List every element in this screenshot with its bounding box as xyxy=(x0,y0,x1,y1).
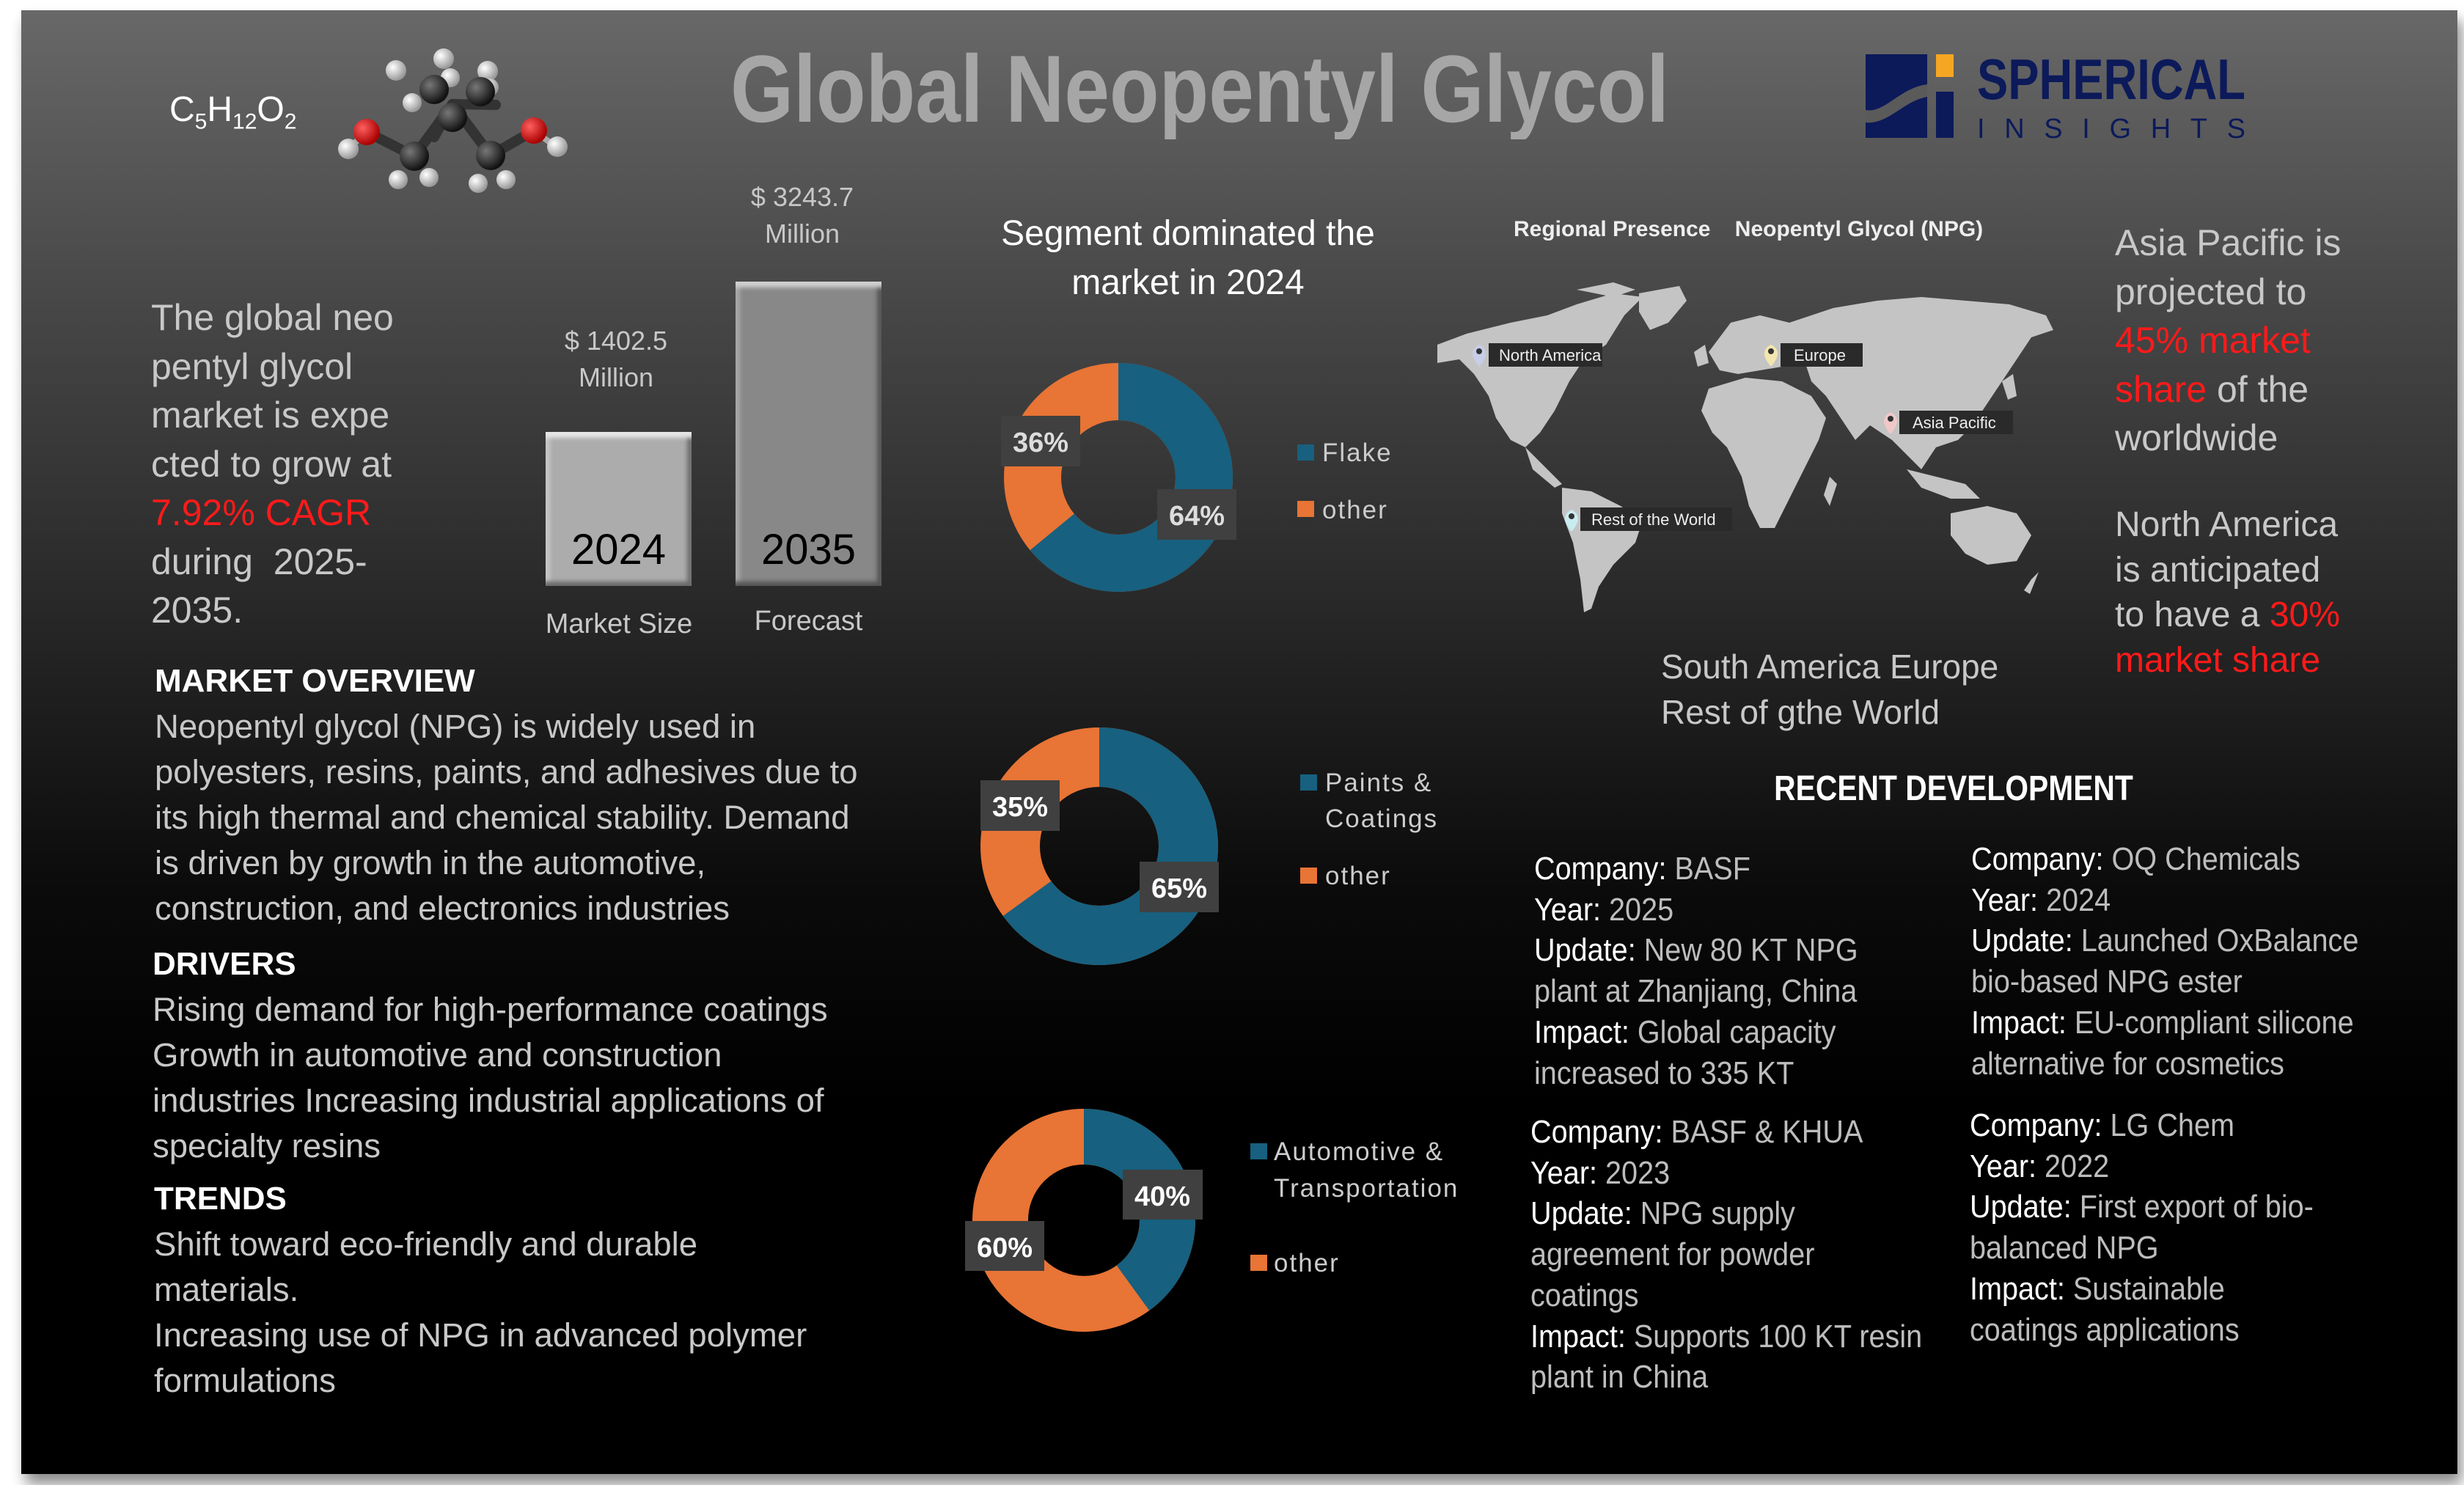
donut chart: automotive & transportation: Transportation xyxy=(1274,1174,1459,1203)
donut chart: paints & coatings: other xyxy=(1325,862,1391,890)
text: region list: Rest of gthe World xyxy=(1661,693,1940,731)
donut chart: paints & coatings: 65% xyxy=(1151,873,1207,904)
dev: BASF & KHUA: Impact: Supports 100 KT resin xyxy=(1530,1319,1922,1354)
panel: drivers: DRIVERS xyxy=(153,946,296,982)
dev: OQ Chemicals: Update: Launched OxBalance xyxy=(1971,923,2358,958)
text: CAGR intro: The global neo xyxy=(151,297,394,338)
dev: BASF: Update: New 80 KT NPG xyxy=(1534,932,1858,968)
donut chart: flake: Flake xyxy=(1322,439,1393,467)
bar 2024 xyxy=(546,432,692,586)
dev: BASF & KHUA: coatings xyxy=(1530,1277,1639,1313)
donut chart: paints & coatings: Coatings xyxy=(1325,804,1438,833)
panel: trends: TRENDS xyxy=(154,1181,287,1217)
dev: OQ Chemicals: bio-based NPG ester xyxy=(1971,964,2243,1000)
dev: LG Chem: coatings applications xyxy=(1970,1312,2240,1348)
dev: BASF xyxy=(1534,851,1858,1091)
dev: BASF: Company: BASF xyxy=(1534,851,1750,887)
panel: market overview: polyesters, resins, paints, and adhesives due to xyxy=(155,753,858,791)
value label 2035 xyxy=(751,182,854,249)
dev: LG Chem: balanced NPG xyxy=(1970,1230,2159,1266)
panel: market overview: MARKET OVERVIEW xyxy=(155,663,475,699)
value label 2024: Million xyxy=(579,362,653,392)
heading: regional presence: Regional Presence Neopentyl Glycol (NPG) xyxy=(1514,217,1983,241)
pin: europe xyxy=(1764,343,1863,367)
panel: drivers: Growth in automotive and construction xyxy=(153,1036,722,1074)
pin: north america: North America xyxy=(1499,346,1602,364)
donut chart: paints & coatings: Paints & xyxy=(1325,769,1432,797)
heading: recent development: RECENT DEVELOPMENT xyxy=(1774,769,2133,808)
donut chart: flake: 64% xyxy=(1169,501,1225,532)
bar 2035: 2035 xyxy=(761,526,856,573)
donut chart: flake: 36% xyxy=(1013,428,1068,458)
donut chart: flake: other xyxy=(1322,496,1388,524)
value label 2035: Million xyxy=(765,219,840,249)
text: asia pacific share xyxy=(2115,222,2341,458)
text: asia pacific share: 45% market xyxy=(2115,320,2311,361)
logo: Spherical Insights xyxy=(1866,53,2245,139)
panel: market overview: Neopentyl glycol (NPG) is widely used in xyxy=(155,708,755,745)
heading: segment: market in 2024 xyxy=(1071,263,1305,302)
donut chart: paints & coatings: 35% xyxy=(992,792,1048,823)
dev: OQ Chemicals: Company: OQ Chemicals xyxy=(1971,841,2300,877)
text: CAGR intro: 2035. xyxy=(151,590,243,631)
panel: trends: Shift toward eco-friendly and durable xyxy=(154,1225,697,1263)
text: CAGR intro xyxy=(151,297,394,631)
panel: drivers xyxy=(153,946,828,1165)
dev: LG Chem: Company: LG Chem xyxy=(1970,1107,2234,1143)
panel: trends: Increasing use of NPG in advanced polymer xyxy=(154,1316,807,1354)
donut chart: automotive & transportation: 40% xyxy=(1134,1181,1190,1212)
dev: OQ Chemicals: Impact: EU-compliant silicone xyxy=(1971,1005,2354,1041)
panel: market overview: its high thermal and chemical stability. Demand xyxy=(155,799,850,836)
donut chart: automotive & transportation: 60% xyxy=(977,1233,1033,1264)
dev: BASF & KHUA xyxy=(1530,1114,1922,1395)
bar 2024: 2024 xyxy=(571,526,666,573)
heading: segment: Segment dominated the xyxy=(1001,214,1375,253)
donut chart: automotive & transportation: Automotive & xyxy=(1274,1137,1444,1166)
bar 2035 xyxy=(736,282,881,586)
axis label market size: Market Size xyxy=(546,609,692,639)
pin: rest of the world xyxy=(1565,507,1732,532)
world map xyxy=(1437,282,2053,612)
text: asia pacific share: worldwide xyxy=(2115,417,2278,458)
pin: rest of the world: Rest of the World xyxy=(1591,510,1716,529)
pin: asia pacific xyxy=(1884,411,2013,434)
dev: LG Chem: Impact: Sustainable xyxy=(1970,1271,2225,1307)
text: north america share: is anticipated xyxy=(2115,550,2320,590)
text: north america share: market share xyxy=(2115,641,2320,679)
dev: BASF: Impact: Global capacity xyxy=(1534,1014,1836,1050)
dev: LG Chem xyxy=(1970,1107,2314,1348)
dev: BASF: increased to 335 KT xyxy=(1534,1055,1794,1091)
dev: BASF & KHUA: Update: NPG supply xyxy=(1530,1195,1795,1231)
dev: BASF: Year: 2025 xyxy=(1534,892,1673,928)
text: CAGR intro: market is expe xyxy=(151,395,389,436)
dev: BASF & KHUA: agreement for powder xyxy=(1530,1236,1814,1272)
panel: market overview xyxy=(155,663,858,927)
value label 2024 xyxy=(565,326,667,392)
panel: drivers: Rising demand for high-performance coatings xyxy=(153,991,828,1028)
text: north america share xyxy=(2115,505,2340,679)
dev: LG Chem: Year: 2022 xyxy=(1970,1148,2109,1184)
dev: OQ Chemicals xyxy=(1971,841,2358,1082)
dev: OQ Chemicals: alternative for cosmetics xyxy=(1971,1046,2284,1082)
donut chart: paints & coatings xyxy=(980,727,1438,965)
text: CAGR intro: pentyl glycol xyxy=(151,346,353,387)
dev: BASF & KHUA: Company: BASF & KHUA xyxy=(1530,1114,1863,1150)
dev: BASF & KHUA: Year: 2023 xyxy=(1530,1155,1670,1191)
panel: market overview: is driven by growth in the automotive, xyxy=(155,844,705,881)
panel: trends: materials. xyxy=(154,1271,298,1308)
value label 2024: $ 1402.5 xyxy=(565,326,667,356)
text: CAGR intro: 7.92% CAGR xyxy=(151,492,371,533)
text: north america share: North America xyxy=(2115,505,2338,544)
dev: BASF & KHUA: plant in China xyxy=(1530,1359,1708,1395)
text: CAGR intro: cted to grow at xyxy=(151,443,392,484)
chemical formula: C5H12O2 xyxy=(169,90,296,134)
dev: BASF: plant at Zhanjiang, China xyxy=(1534,973,1857,1009)
axis label forecast: Forecast xyxy=(755,606,862,637)
donut chart: automotive & transportation xyxy=(965,1109,1459,1332)
panel: drivers: industries Increasing industrial applications of xyxy=(153,1082,824,1119)
text: asia pacific share: Asia Pacific is xyxy=(2115,222,2341,263)
donut chart: flake xyxy=(1001,363,1393,592)
panel: trends xyxy=(154,1181,807,1399)
text: region list: South America Europe xyxy=(1661,648,1998,686)
text: CAGR intro: during 2025- xyxy=(151,541,367,582)
pin: europe: Europe xyxy=(1794,346,1846,364)
bar chart: market size xyxy=(546,182,881,639)
panel: drivers: specialty resins xyxy=(153,1127,381,1165)
panel: trends: formulations xyxy=(154,1362,336,1399)
dev: OQ Chemicals: Year: 2024 xyxy=(1971,882,2111,918)
icon: molecule xyxy=(338,48,568,193)
heading: segment xyxy=(1001,214,1375,302)
value label 2035: $ 3243.7 xyxy=(751,182,854,212)
text: north america share: to have a 30% xyxy=(2115,595,2340,634)
panel: market overview: construction, and electronics industries xyxy=(155,890,730,927)
dev: LG Chem: Update: First export of bio- xyxy=(1970,1189,2314,1225)
text: asia pacific share: share of the xyxy=(2115,368,2309,409)
text: region list xyxy=(1661,648,1998,731)
donut chart: automotive & transportation: other xyxy=(1274,1249,1340,1277)
pin: asia pacific: Asia Pacific xyxy=(1913,414,1996,432)
pin: north america xyxy=(1473,343,1602,367)
text: asia pacific share: projected to xyxy=(2115,271,2306,312)
